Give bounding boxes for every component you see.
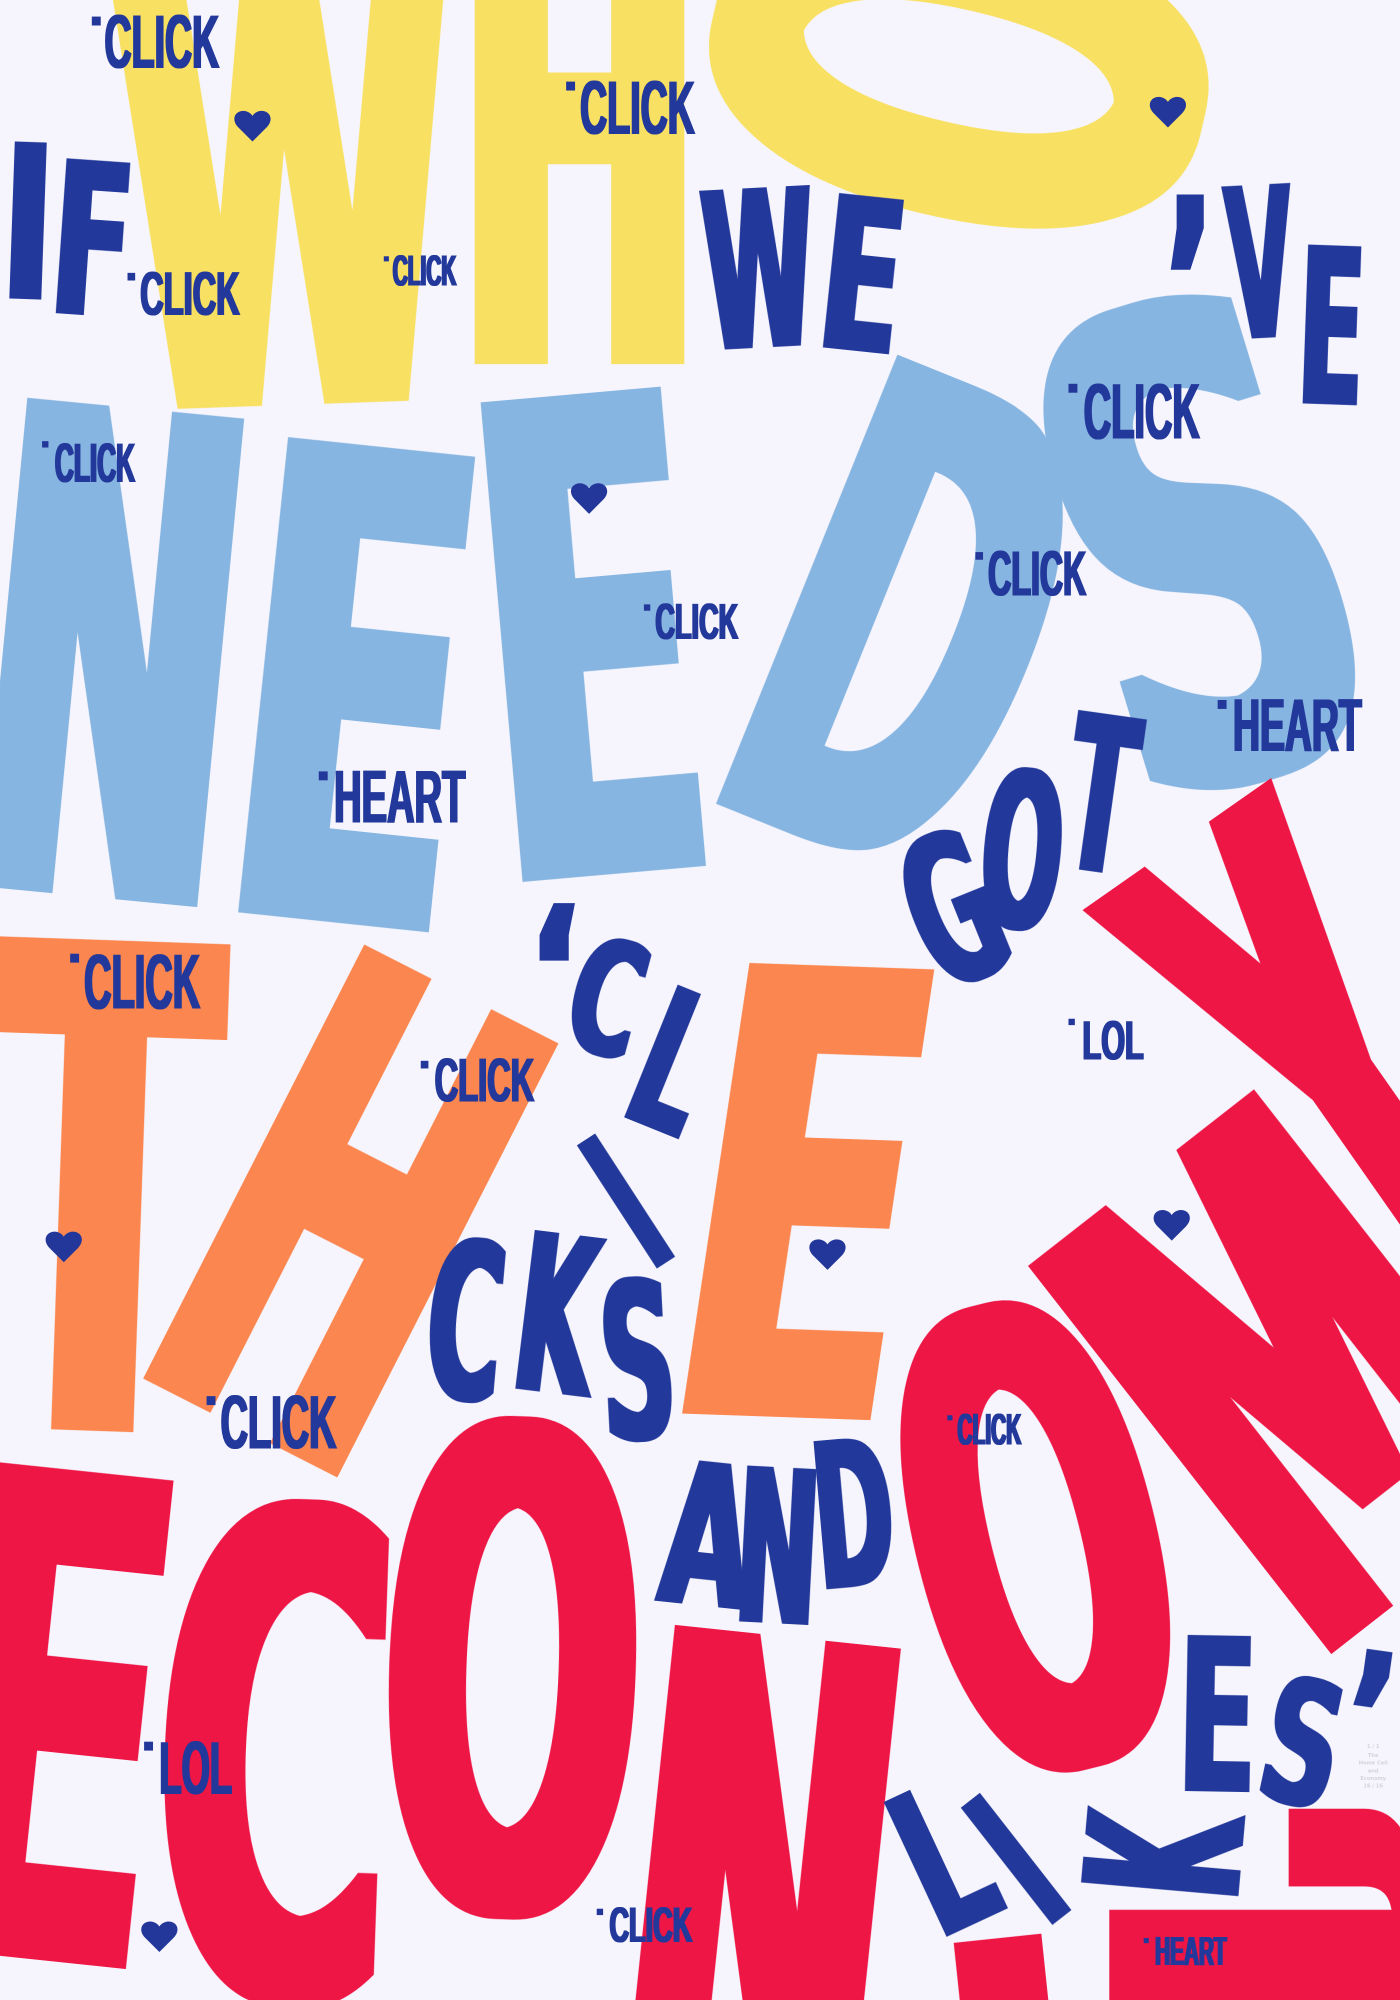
cropped red letters at the bottom edge xyxy=(923,1790,1400,2000)
navy word: 'CLICKS: I xyxy=(550,1096,706,1312)
text: CLICK xyxy=(84,940,200,1026)
text: CLICK xyxy=(958,1406,1021,1455)
navy word: GOT: T xyxy=(1052,669,1150,927)
text: CLICK xyxy=(1084,367,1200,456)
small print credit: The xyxy=(1368,1753,1379,1759)
label: CLICK 8 xyxy=(644,593,738,650)
text: CLICK xyxy=(55,431,135,494)
text: CLICK xyxy=(393,248,456,296)
text: CLICK xyxy=(580,66,695,151)
small print credit xyxy=(1359,1744,1388,1790)
navy word: 'CLICKS: L xyxy=(601,946,747,1182)
icon: heart 5 xyxy=(809,1239,846,1270)
navy word: LIKES' xyxy=(861,1594,1400,1984)
label: CLICK 8: CLICK xyxy=(655,593,738,650)
icon: heart 4 xyxy=(46,1232,82,1262)
navy word: AND: A xyxy=(652,1419,762,1656)
navy word: 'CLICKS: S xyxy=(594,1235,681,1493)
text: CLICK xyxy=(105,0,219,85)
navy word: LIKES': K xyxy=(1039,1800,1297,1907)
navy phrase: IF WE'VE xyxy=(0,99,1368,457)
icon: heart 3 xyxy=(571,483,607,514)
label: CLICK 11 xyxy=(207,1380,337,1465)
label: CLICK 7: CLICK xyxy=(988,537,1086,609)
headline word: ECONOMY xyxy=(0,672,1400,2000)
small print credit: 16 / 16 xyxy=(1363,1784,1383,1790)
navy word: GOT: G xyxy=(869,784,1039,1039)
navy word: AND xyxy=(652,1395,903,1677)
navy phrase: IF WE'VE: E xyxy=(811,151,914,406)
label: HEART 1: HEART xyxy=(334,754,465,838)
navy phrase: IF WE'VE: F xyxy=(45,117,139,369)
label: HEART 3: HEART xyxy=(1155,1928,1227,1974)
text: CLICK xyxy=(221,1380,337,1465)
navy word: GOT xyxy=(869,669,1150,1039)
navy phrase: IF WE'VE: I xyxy=(0,99,56,351)
headline word: NEEDS: D xyxy=(639,224,1174,1041)
headline word: THE xyxy=(0,803,970,1627)
navy word: LIKES': E xyxy=(1177,1594,1257,1844)
navy word: 'CLICKS: C xyxy=(417,1194,514,1455)
label: HEART 3 xyxy=(1144,1928,1227,1974)
label: CLICK 1 xyxy=(92,0,219,85)
headline word: ECONOMY: O xyxy=(827,1161,1250,1935)
headline word: NEEDS: E xyxy=(450,256,733,1040)
label: CLICK 10 xyxy=(421,1046,534,1116)
navy phrase: IF WE'VE: ’ xyxy=(1167,147,1213,429)
icon: heart 7 xyxy=(141,1921,178,1952)
navy word: LIKES': L xyxy=(861,1738,1028,1984)
navy word: 'CLICKS: K xyxy=(503,1187,614,1450)
label: CLICK 6 xyxy=(42,431,135,494)
headline word: NEEDS xyxy=(0,149,1400,1088)
label: CLICK 2 xyxy=(566,66,695,151)
headline word: THE: H xyxy=(54,818,636,1627)
label: LOL 1: LOL xyxy=(1083,1009,1144,1072)
navy word: AND: D xyxy=(804,1395,903,1638)
text: LOL xyxy=(159,1726,232,1810)
navy word: 'CLICKS: C xyxy=(549,900,665,1098)
label: CLICK 10: CLICK xyxy=(435,1046,534,1116)
headline word: THE: E xyxy=(640,841,970,1567)
label: CLICK 13 xyxy=(597,1897,692,1953)
label: CLICK 3 xyxy=(128,259,240,329)
label: CLICK 7 xyxy=(975,537,1086,609)
label: CLICK 13: CLICK xyxy=(609,1897,692,1953)
navy phrase: IF WE'VE: V xyxy=(1221,141,1299,389)
icon: heart 6 xyxy=(1154,1210,1190,1241)
label: HEART 1 xyxy=(319,754,465,838)
navy word: 'CLICKS xyxy=(417,868,747,1493)
label: CLICK 3: CLICK xyxy=(140,259,240,329)
headline word: NEEDS: E xyxy=(202,306,506,1088)
navy word: LIKES': S xyxy=(1245,1638,1360,1852)
small print credit: Home Cell xyxy=(1359,1761,1388,1767)
label: CLICK 12 xyxy=(947,1406,1021,1455)
headline word: WHO xyxy=(105,0,1383,551)
navy phrase: IF WE'VE: E xyxy=(1295,200,1368,457)
navy word: LIKES': I xyxy=(931,1757,1106,1967)
navy phrase: IF WE'VE: W xyxy=(697,143,821,403)
label: CLICK 4 xyxy=(384,248,456,296)
navy word: GOT: O xyxy=(971,725,1073,983)
icon: heart 1 xyxy=(234,111,271,142)
small print credit: 1 / 1 xyxy=(1367,1744,1380,1750)
label: CLICK 9 xyxy=(70,940,200,1026)
icon: heart 2 xyxy=(1150,97,1186,128)
label: LOL 2 xyxy=(144,1726,232,1810)
navy word: 'CLICKS: ‘ xyxy=(530,868,579,1082)
small print credit: Economy xyxy=(1360,1776,1387,1782)
small print credit: and xyxy=(1368,1768,1379,1774)
label: LOL 1 xyxy=(1068,1009,1144,1072)
label: CLICK 5 xyxy=(1068,367,1200,456)
navy word: AND: N xyxy=(731,1424,825,1677)
